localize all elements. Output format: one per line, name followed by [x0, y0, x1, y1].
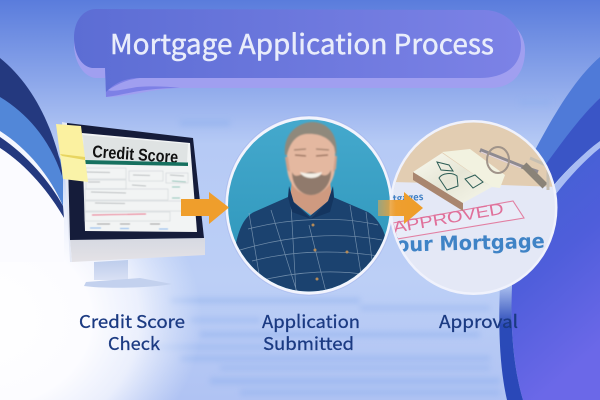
curve: medium blue band	[0, 95, 63, 212]
approved clipped content	[392, 122, 555, 292]
approved ring	[390, 120, 558, 295]
step 3: approved mortgage photo	[383, 120, 560, 296]
shirt buttons	[312, 224, 348, 280]
smile	[300, 172, 322, 178]
sticky note	[56, 124, 88, 182]
arrow: application to approval	[378, 192, 423, 224]
label: application submitted: Submitted	[263, 331, 354, 356]
monitor side	[62, 122, 72, 262]
shirt	[236, 197, 385, 292]
right dark band	[546, 98, 600, 186]
label: credit score check: Credit Score	[79, 309, 185, 334]
beard	[292, 170, 331, 195]
key ring	[480, 147, 548, 190]
bubble shadow layer	[74, 20, 525, 97]
approved stamp	[392, 201, 524, 239]
right dark lower band	[499, 285, 523, 400]
left white area	[0, 145, 205, 400]
right main fill	[511, 142, 600, 400]
right decorative shape	[499, 57, 600, 400]
monitor stand	[94, 260, 128, 280]
house windows	[437, 162, 483, 190]
photo ring	[225, 116, 393, 295]
house key thickness	[413, 172, 463, 211]
left decorative curves	[0, 58, 64, 262]
hair	[285, 122, 337, 157]
house key roof	[413, 153, 492, 203]
monitor screen	[82, 133, 197, 232]
photo clipped content	[228, 120, 390, 292]
right light line	[553, 141, 600, 194]
curve: navy lower band	[0, 137, 64, 218]
ears	[285, 156, 337, 172]
step 2: applicant photo	[225, 116, 395, 300]
form fields	[85, 168, 188, 229]
label: application submitted	[262, 309, 360, 356]
background streaks	[150, 100, 550, 395]
eyes	[295, 155, 328, 156]
your mortgage text: Your Mortgage	[383, 229, 545, 257]
house key side	[442, 149, 505, 188]
bubble tail	[105, 66, 180, 97]
collar	[288, 186, 334, 219]
monitor base	[84, 278, 172, 288]
monitor chin	[70, 238, 205, 262]
eyebrows	[294, 149, 329, 150]
screen heading: Credit Score	[92, 142, 179, 167]
step 1: credit score monitor	[56, 122, 205, 288]
curve: white line	[0, 131, 63, 212]
photo backdrop	[225, 116, 395, 296]
bubble main	[74, 9, 521, 92]
label: approval: Approval	[439, 309, 518, 334]
screen header	[83, 135, 188, 162]
paper	[390, 182, 560, 296]
mortgages small text: tgages	[392, 189, 424, 205]
label: credit score check	[79, 309, 185, 356]
monitor bezel	[67, 123, 204, 240]
head group	[285, 122, 337, 195]
arrow: credit score to application	[181, 192, 229, 224]
neck	[290, 180, 332, 215]
shirt plaid	[240, 205, 382, 292]
approved stamp: APPROVED	[392, 201, 505, 237]
tan table	[390, 120, 560, 190]
right medium blue band	[534, 57, 600, 166]
white fill below curves	[0, 148, 64, 262]
title speech bubble	[74, 9, 525, 97]
curve: navy upper band	[0, 58, 62, 176]
face	[287, 132, 335, 195]
title text: Mortgage Application Process	[110, 22, 494, 62]
teal bar	[84, 160, 188, 166]
label: application submitted: Application	[262, 309, 360, 334]
label: credit score check: Check	[108, 331, 160, 356]
